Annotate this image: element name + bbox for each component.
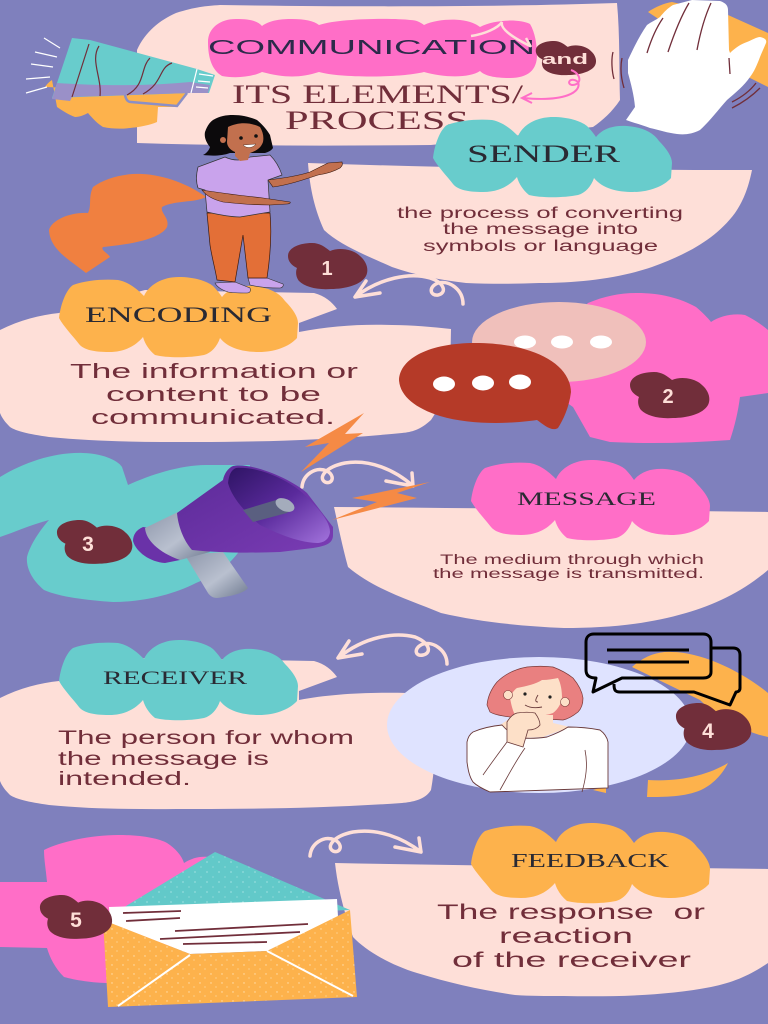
letter lines <box>123 911 308 944</box>
receiver text: the message is <box>58 749 269 770</box>
feet <box>215 282 250 293</box>
badge: number 3 <box>57 520 132 564</box>
blob: orange <box>49 174 206 273</box>
trousers <box>207 213 271 282</box>
badge: number 3: 3 <box>82 533 94 556</box>
illustration: receiver woman <box>387 657 691 793</box>
letter <box>109 899 338 954</box>
feedback text: The response or <box>437 901 705 924</box>
feedback text: reaction <box>499 925 633 948</box>
panel: title <box>137 3 620 146</box>
panel: receiver <box>0 640 434 809</box>
badge: number 5 <box>40 895 112 939</box>
badge: number 5: 5 <box>70 909 82 932</box>
receiver text: intended. <box>58 769 191 790</box>
receiver tag <box>59 640 298 720</box>
panel: message <box>334 460 768 628</box>
feedback text <box>437 901 705 972</box>
message text: The medium through which <box>440 552 704 567</box>
hand <box>507 712 540 747</box>
sweater <box>467 725 608 792</box>
badge: and <box>536 41 596 75</box>
badge: number 4: 4 <box>702 720 714 743</box>
sender text: the message into <box>443 221 638 238</box>
icon: envelope <box>103 852 357 1007</box>
icon: chat bubbles <box>399 293 768 443</box>
red bubble dots <box>433 374 531 392</box>
panel: feedback <box>335 823 768 996</box>
message heading: MESSAGE <box>517 489 656 510</box>
envelope flap <box>103 852 350 920</box>
panel: encoding <box>0 277 451 442</box>
light bubble <box>472 302 646 382</box>
message tag <box>471 460 710 540</box>
receiver heading: RECEIVER <box>103 668 247 689</box>
right arm <box>268 162 342 187</box>
icon: lightning bolts <box>301 413 430 520</box>
badge: number 1 <box>288 243 367 289</box>
blob: pink <box>0 835 250 983</box>
face <box>227 123 263 161</box>
encoding heading: ENCODING <box>85 302 272 327</box>
badge: number 1: 1 <box>321 258 333 280</box>
circle backdrop <box>387 657 691 793</box>
receiver text: The person for whom <box>58 728 354 749</box>
encoding text: communicated. <box>91 406 335 429</box>
heading: COMMUNICATION: COMMUNICATION <box>208 37 535 59</box>
encoding text <box>70 360 358 429</box>
arrow: encoding to message <box>302 462 413 487</box>
red bubble <box>399 343 571 429</box>
heading: COMMUNICATION <box>208 19 537 78</box>
bell inside <box>228 468 330 543</box>
arrow: title squiggle <box>471 22 531 47</box>
inner rod <box>243 500 294 522</box>
badge: and: and <box>542 51 588 68</box>
encoding text: content to be <box>106 383 321 406</box>
light bubble dots <box>514 336 612 348</box>
bell <box>177 465 333 553</box>
icon: outlined speech bubbles <box>586 634 740 705</box>
feedback tag <box>471 823 710 903</box>
blob: teal <box>0 453 250 602</box>
heading: its elements / process: PROCESS <box>285 106 469 135</box>
heading: its elements / process: ITS ELEMENTS/ <box>232 80 524 109</box>
message text <box>433 552 704 581</box>
icon: hand wave <box>612 0 768 134</box>
feedback text: of the receiver <box>452 949 691 972</box>
face <box>510 678 562 716</box>
envelope folds <box>118 951 353 1006</box>
handle <box>185 552 248 598</box>
hair <box>487 666 583 720</box>
heading: its elements / process <box>232 80 524 135</box>
encoding text: The information or <box>70 360 358 383</box>
neck <box>500 715 570 738</box>
badge: number 2: 2 <box>662 386 674 408</box>
badge: number 2 <box>630 372 709 418</box>
person: sender figure <box>196 115 342 293</box>
icon: purple megaphone <box>133 465 333 598</box>
hair <box>203 115 273 156</box>
envelope body <box>103 910 357 1007</box>
receiver text <box>58 728 354 790</box>
sender heading: SENDER <box>467 141 621 168</box>
sender text <box>397 205 683 255</box>
back cap <box>133 527 180 563</box>
grey collar <box>145 512 210 560</box>
sweater folds <box>483 742 586 792</box>
blob: orange arc <box>593 652 768 797</box>
left arm <box>202 190 290 205</box>
icon: small megaphone <box>26 38 215 129</box>
encoding tag <box>59 277 298 357</box>
badge: number 4 <box>676 703 751 750</box>
sender text: the process of converting <box>397 205 683 222</box>
arrow: message to receiver <box>338 635 447 664</box>
message text: the message is transmitted. <box>433 566 704 581</box>
arrow: receiver to feedback <box>310 831 421 856</box>
panel: sender <box>308 117 752 284</box>
sender tag <box>433 117 672 197</box>
sender text: symbols or language <box>423 238 658 255</box>
pink blob <box>520 293 768 443</box>
arrow: pink squiggle <box>522 70 579 103</box>
shirt <box>196 155 282 217</box>
arrow: sender to encoding <box>355 276 463 304</box>
feedback heading: FEEDBACK <box>511 850 670 872</box>
